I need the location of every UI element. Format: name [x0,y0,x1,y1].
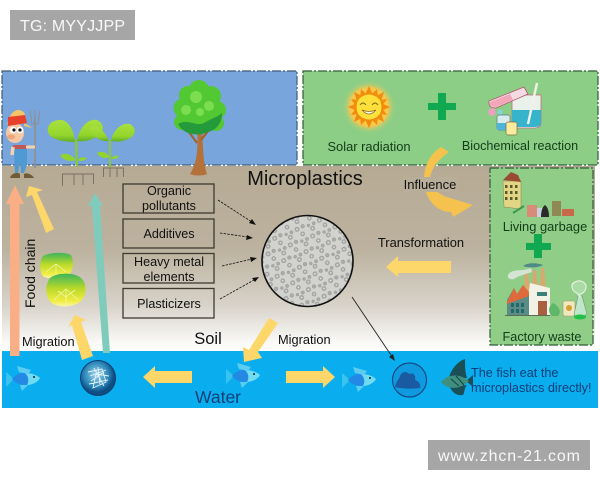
arrow: up to farmer [26,186,54,233]
text: fish eat microplastics: The fish eat the [471,366,558,380]
arrow: right in water [286,366,335,388]
text: soil: Soil [194,330,222,348]
text: solar radiation: Solar radiation [327,139,411,154]
icon: seedling left [48,120,103,167]
box: heavy metal elements [123,254,214,284]
arrow: food chain [6,185,24,356]
panel: waste sources [490,168,593,345]
arrow: migration to lettuce [68,315,93,360]
arrows: inputs to microplastics [218,200,259,299]
icon: factory [505,263,560,316]
icon: living garbage buildings [503,172,574,217]
box: plasticizers: Plasticizers [137,297,201,311]
icon: farmer [4,110,40,178]
icon: fish left [6,366,40,391]
icon: fish right [342,367,376,392]
arrow: teal up to plant [88,193,110,353]
text: transformation: Transformation [378,235,464,250]
box: heavy metal elements: Heavy metal [134,255,204,269]
panel: water [2,351,598,408]
icon: seedling right [90,124,135,168]
text: migration right: Migration [278,332,331,347]
icon: microplastics circle [262,216,353,306]
text: biochemical reaction: Biochemical reaction [462,139,578,153]
icon: roots left [62,174,94,186]
box: additives: Additives [143,227,195,241]
tag: top watermark [10,10,135,40]
text: fish eat microplastics [471,366,592,395]
icon: angelfish [441,359,473,395]
text: water: Water [195,387,241,407]
box: heavy metal elements: elements [143,270,195,284]
arrow: left in water [143,366,192,388]
tag: bottom watermark: www.zhcn-21.com [437,448,580,465]
icon: plus top [428,93,456,120]
icon: biochemical flasks [488,83,541,135]
arrow: migration soil to water [243,318,278,362]
icon: plus middle [526,234,551,258]
panel: environmental factors [303,71,598,165]
text: living garbage: Living garbage [503,219,587,234]
text: influence: Influence [404,177,456,192]
icon: fish middle [226,363,260,388]
icon: microplastic sphere [80,360,116,396]
box: additives [123,219,214,248]
icon: lettuce lower [46,274,86,307]
icon: plastic-filled circle [392,363,426,397]
tag: top watermark: TG: MYYJJPP [20,18,125,35]
icon: roots right [104,168,124,177]
tag: bottom watermark [428,440,590,470]
box: organic pollutants: Organic [147,184,191,198]
text: factory waste: Factory waste [503,330,581,344]
text: migration left: Migration [22,334,75,349]
arrow: transformation [386,256,451,277]
box: organic pollutants [123,184,214,213]
text: fish eat microplastics: microplastics directly! [471,381,592,395]
arrow: influence curve [424,147,473,217]
icon: chemical waste flask [563,281,587,320]
text: food chain: Food chain [22,239,38,308]
icon: lettuce upper [40,253,73,278]
icon: tree [174,80,226,176]
box: plasticizers [123,288,214,318]
panel: sky [2,71,297,165]
text: microplastics heading: Microplastics [247,168,363,190]
icon: sun [342,80,396,134]
box: organic pollutants: pollutants [142,199,196,213]
panel: soil background [2,166,595,352]
arrow: microplastics to fish [352,297,395,361]
